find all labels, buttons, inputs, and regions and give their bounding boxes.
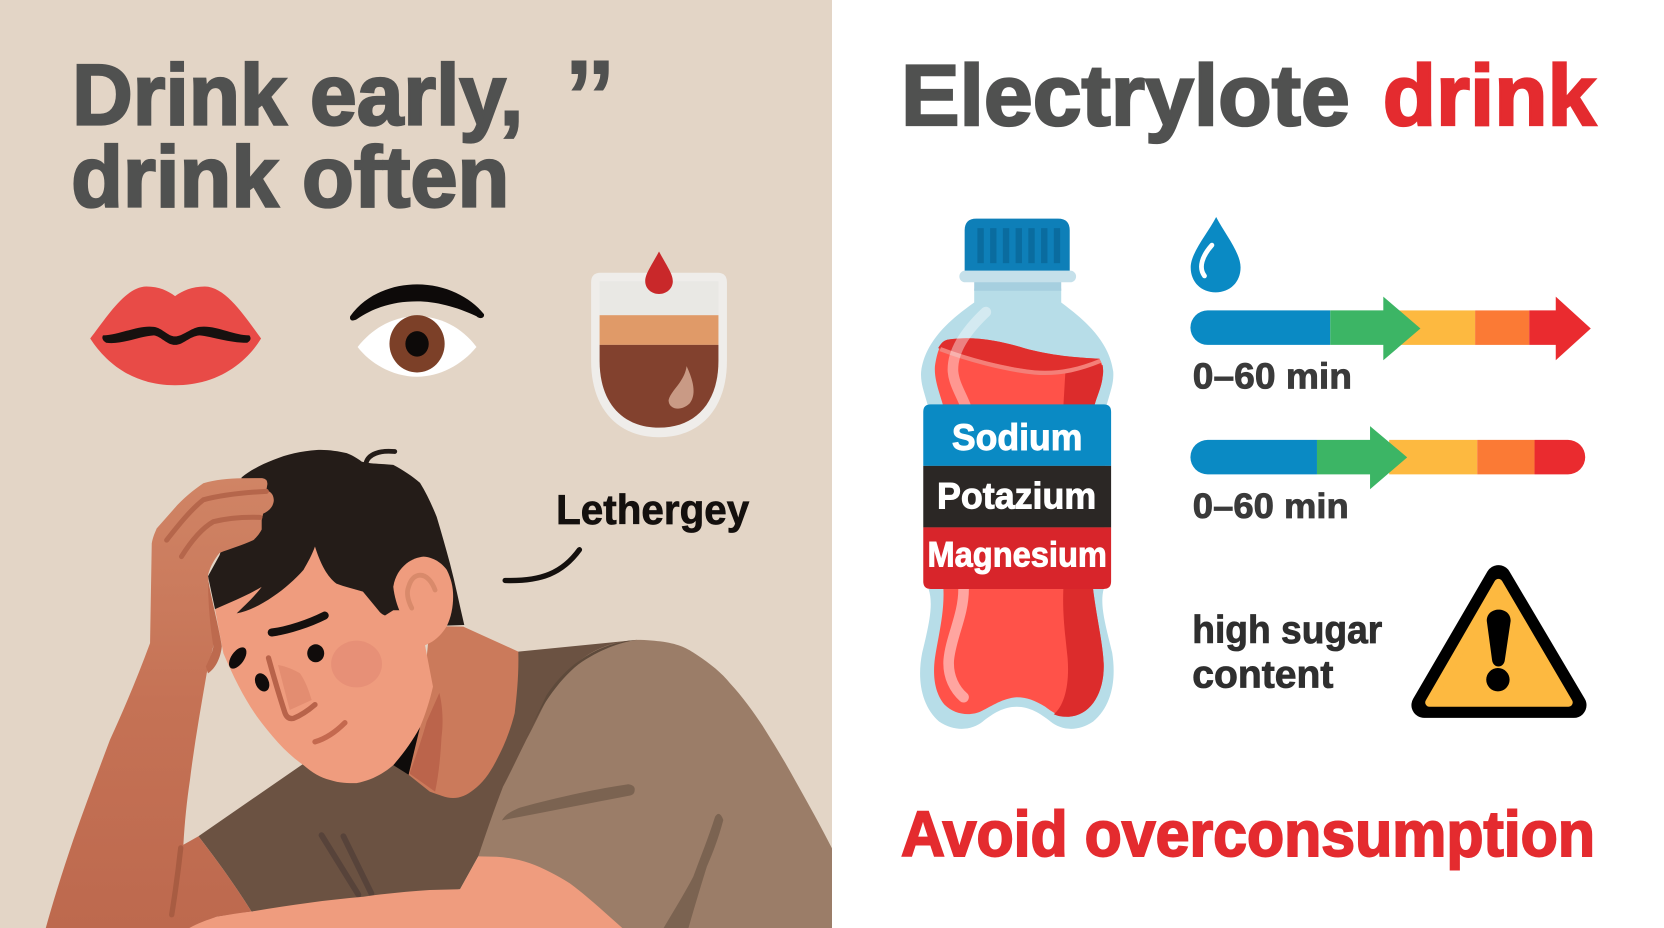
footer warning: avoid overconsumption: Avoid overconsumption bbox=[901, 799, 1595, 870]
forearm in the foreground bbox=[188, 856, 623, 928]
neck bbox=[409, 626, 518, 798]
shirt: lit side bbox=[478, 640, 832, 928]
text: high sugar content: content bbox=[1192, 653, 1333, 697]
icon: dry lips bbox=[90, 287, 261, 385]
label: time range: 0–60 min bbox=[1193, 355, 1352, 396]
icon: sports drink bottle bbox=[920, 219, 1114, 729]
icon: dark urine sample bbox=[591, 252, 727, 437]
timeline arrow 1 bbox=[1190, 297, 1591, 396]
liquid: upper bbox=[935, 338, 1103, 406]
liquid: lower bbox=[934, 589, 1104, 717]
callout: lethargy label bbox=[505, 487, 749, 581]
neck ring bbox=[959, 271, 1076, 282]
highlights bbox=[953, 312, 986, 406]
neck strip bbox=[974, 281, 1061, 291]
shirt creases bbox=[322, 640, 723, 928]
eyebrow, eyes, mouth bbox=[225, 616, 345, 742]
timeline arrow 2 bbox=[1190, 426, 1585, 526]
hair bbox=[208, 450, 464, 626]
callout: lethargy label: Lethergey bbox=[556, 487, 749, 533]
title: drink early, drink often: drink often bbox=[71, 129, 509, 225]
ear bbox=[393, 557, 453, 645]
inner ear bbox=[408, 575, 435, 608]
panel: electrolyte drink (right) bbox=[832, 0, 1664, 928]
shirt: shadow side bbox=[198, 640, 637, 912]
heading: drink bbox=[1383, 48, 1596, 144]
label: time range: 0–60 min bbox=[1193, 487, 1349, 526]
illustration: tired man holding his head bbox=[46, 450, 832, 928]
decorative closing quote mark: ” bbox=[564, 39, 617, 157]
icon: warning triangle bbox=[1424, 578, 1574, 705]
label: electrolytes: Potazium bbox=[937, 474, 1096, 516]
darker neck strip bbox=[410, 693, 443, 792]
panel: symptoms (left) bbox=[0, 0, 832, 928]
blush bbox=[331, 641, 382, 687]
nose bbox=[268, 658, 315, 719]
title: drink early, drink often: Drink early, bbox=[72, 48, 523, 144]
icon: sunken eye bbox=[350, 284, 484, 377]
icon: water drop bbox=[1191, 217, 1241, 292]
bottle cap bbox=[965, 219, 1070, 271]
finger lines and arm crease bbox=[167, 491, 266, 915]
label: electrolytes: Sodium bbox=[952, 416, 1082, 458]
text: high sugar content bbox=[1192, 608, 1382, 697]
title: drink early, drink often bbox=[71, 48, 523, 225]
heading: Electrylote bbox=[901, 48, 1350, 144]
bottle body bbox=[920, 289, 1114, 729]
heading bbox=[901, 48, 1596, 144]
face bbox=[215, 531, 433, 783]
black shadow under chin bbox=[393, 727, 420, 775]
text: high sugar content: high sugar bbox=[1192, 608, 1382, 652]
raised arm and hand bbox=[46, 478, 274, 928]
label: electrolytes: Magnesium bbox=[928, 536, 1107, 575]
label: electrolytes bbox=[923, 404, 1111, 589]
palm edge shading bbox=[206, 579, 222, 673]
